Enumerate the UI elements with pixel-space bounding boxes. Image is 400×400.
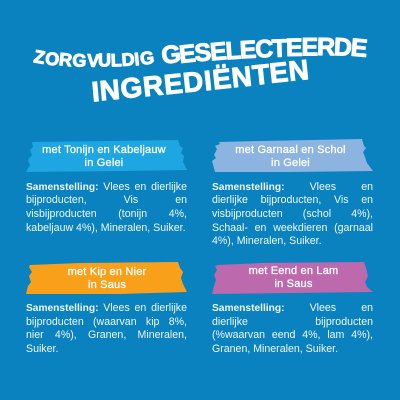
banner heading	[68, 266, 146, 290]
banner heading: in Gelei	[85, 156, 123, 168]
banner heading: in Saus	[274, 278, 313, 290]
banner heading: met Tonijn en Kabeljauw	[42, 144, 166, 156]
banner heading: met Garnaal en Schol	[235, 144, 346, 156]
title: INGREDIËNTEN	[90, 54, 310, 107]
title	[32, 33, 369, 107]
ingredients text: Samenstelling: Vlees en	[212, 302, 373, 314]
panel: eend en lam	[212, 262, 373, 355]
banner: light blue brush	[26, 140, 187, 172]
ingredients text: visbijproducten (schol 4%),	[212, 208, 373, 220]
ingredients text: nier 4%), Granen, Mineralen,	[26, 329, 187, 341]
ingredients text: Suiker.	[26, 343, 58, 355]
banner: periwinkle brush	[212, 139, 373, 172]
banner heading: met Eend en Lam	[249, 265, 338, 277]
ingredients text: Samenstelling: Vlees en dierlijke	[26, 180, 187, 192]
ingredients text: Schaal- en weekdieren (garnaal	[212, 222, 373, 234]
ingredients text	[26, 180, 187, 234]
ingredients text: visbijproducten (tonijn 4%,	[26, 208, 187, 220]
ingredients text: bijproducten, Vis en	[26, 194, 187, 206]
ingredients text	[212, 180, 373, 247]
banner heading	[42, 144, 166, 168]
ingredients text	[26, 302, 187, 355]
banner: purple brush	[212, 262, 373, 294]
ingredients text: Granen, Mineralen, Suiker.	[212, 343, 338, 355]
ingredients text: 4%), Mineralen, Suiker.	[212, 235, 322, 247]
ingredients text	[212, 302, 373, 355]
banner heading	[235, 144, 346, 168]
title: ZORGVULDIG	[32, 46, 155, 71]
title: GESELECTEERDE	[160, 33, 369, 70]
ingredients text: dierlijke bijproducten, Vis en	[212, 194, 373, 206]
banner: orange brush	[26, 262, 187, 294]
ingredients text: Samenstelling: Vlees en dierlijke	[26, 302, 187, 314]
banner heading: met Kip en Nier	[68, 266, 146, 278]
banner heading	[249, 265, 338, 290]
ingredients text: dierlijke bijproducten	[212, 316, 373, 328]
panel: garnaal en schol	[212, 139, 373, 247]
ingredients text: (%waarvan eend 4%, lam 4%),	[212, 329, 373, 341]
ingredients text: kabeljauw 4%), Mineralen, Suiker.	[26, 222, 186, 234]
panel: kip en nier	[26, 262, 187, 355]
banner heading: in Saus	[88, 278, 126, 290]
panel: tonijn en kabeljauw	[26, 140, 187, 234]
ingredients text: Samenstelling: Vlees en	[212, 180, 373, 192]
banner heading: in Gelei	[271, 156, 310, 168]
ingredients text: bijproducten (waarvan kip 8%,	[26, 316, 187, 328]
